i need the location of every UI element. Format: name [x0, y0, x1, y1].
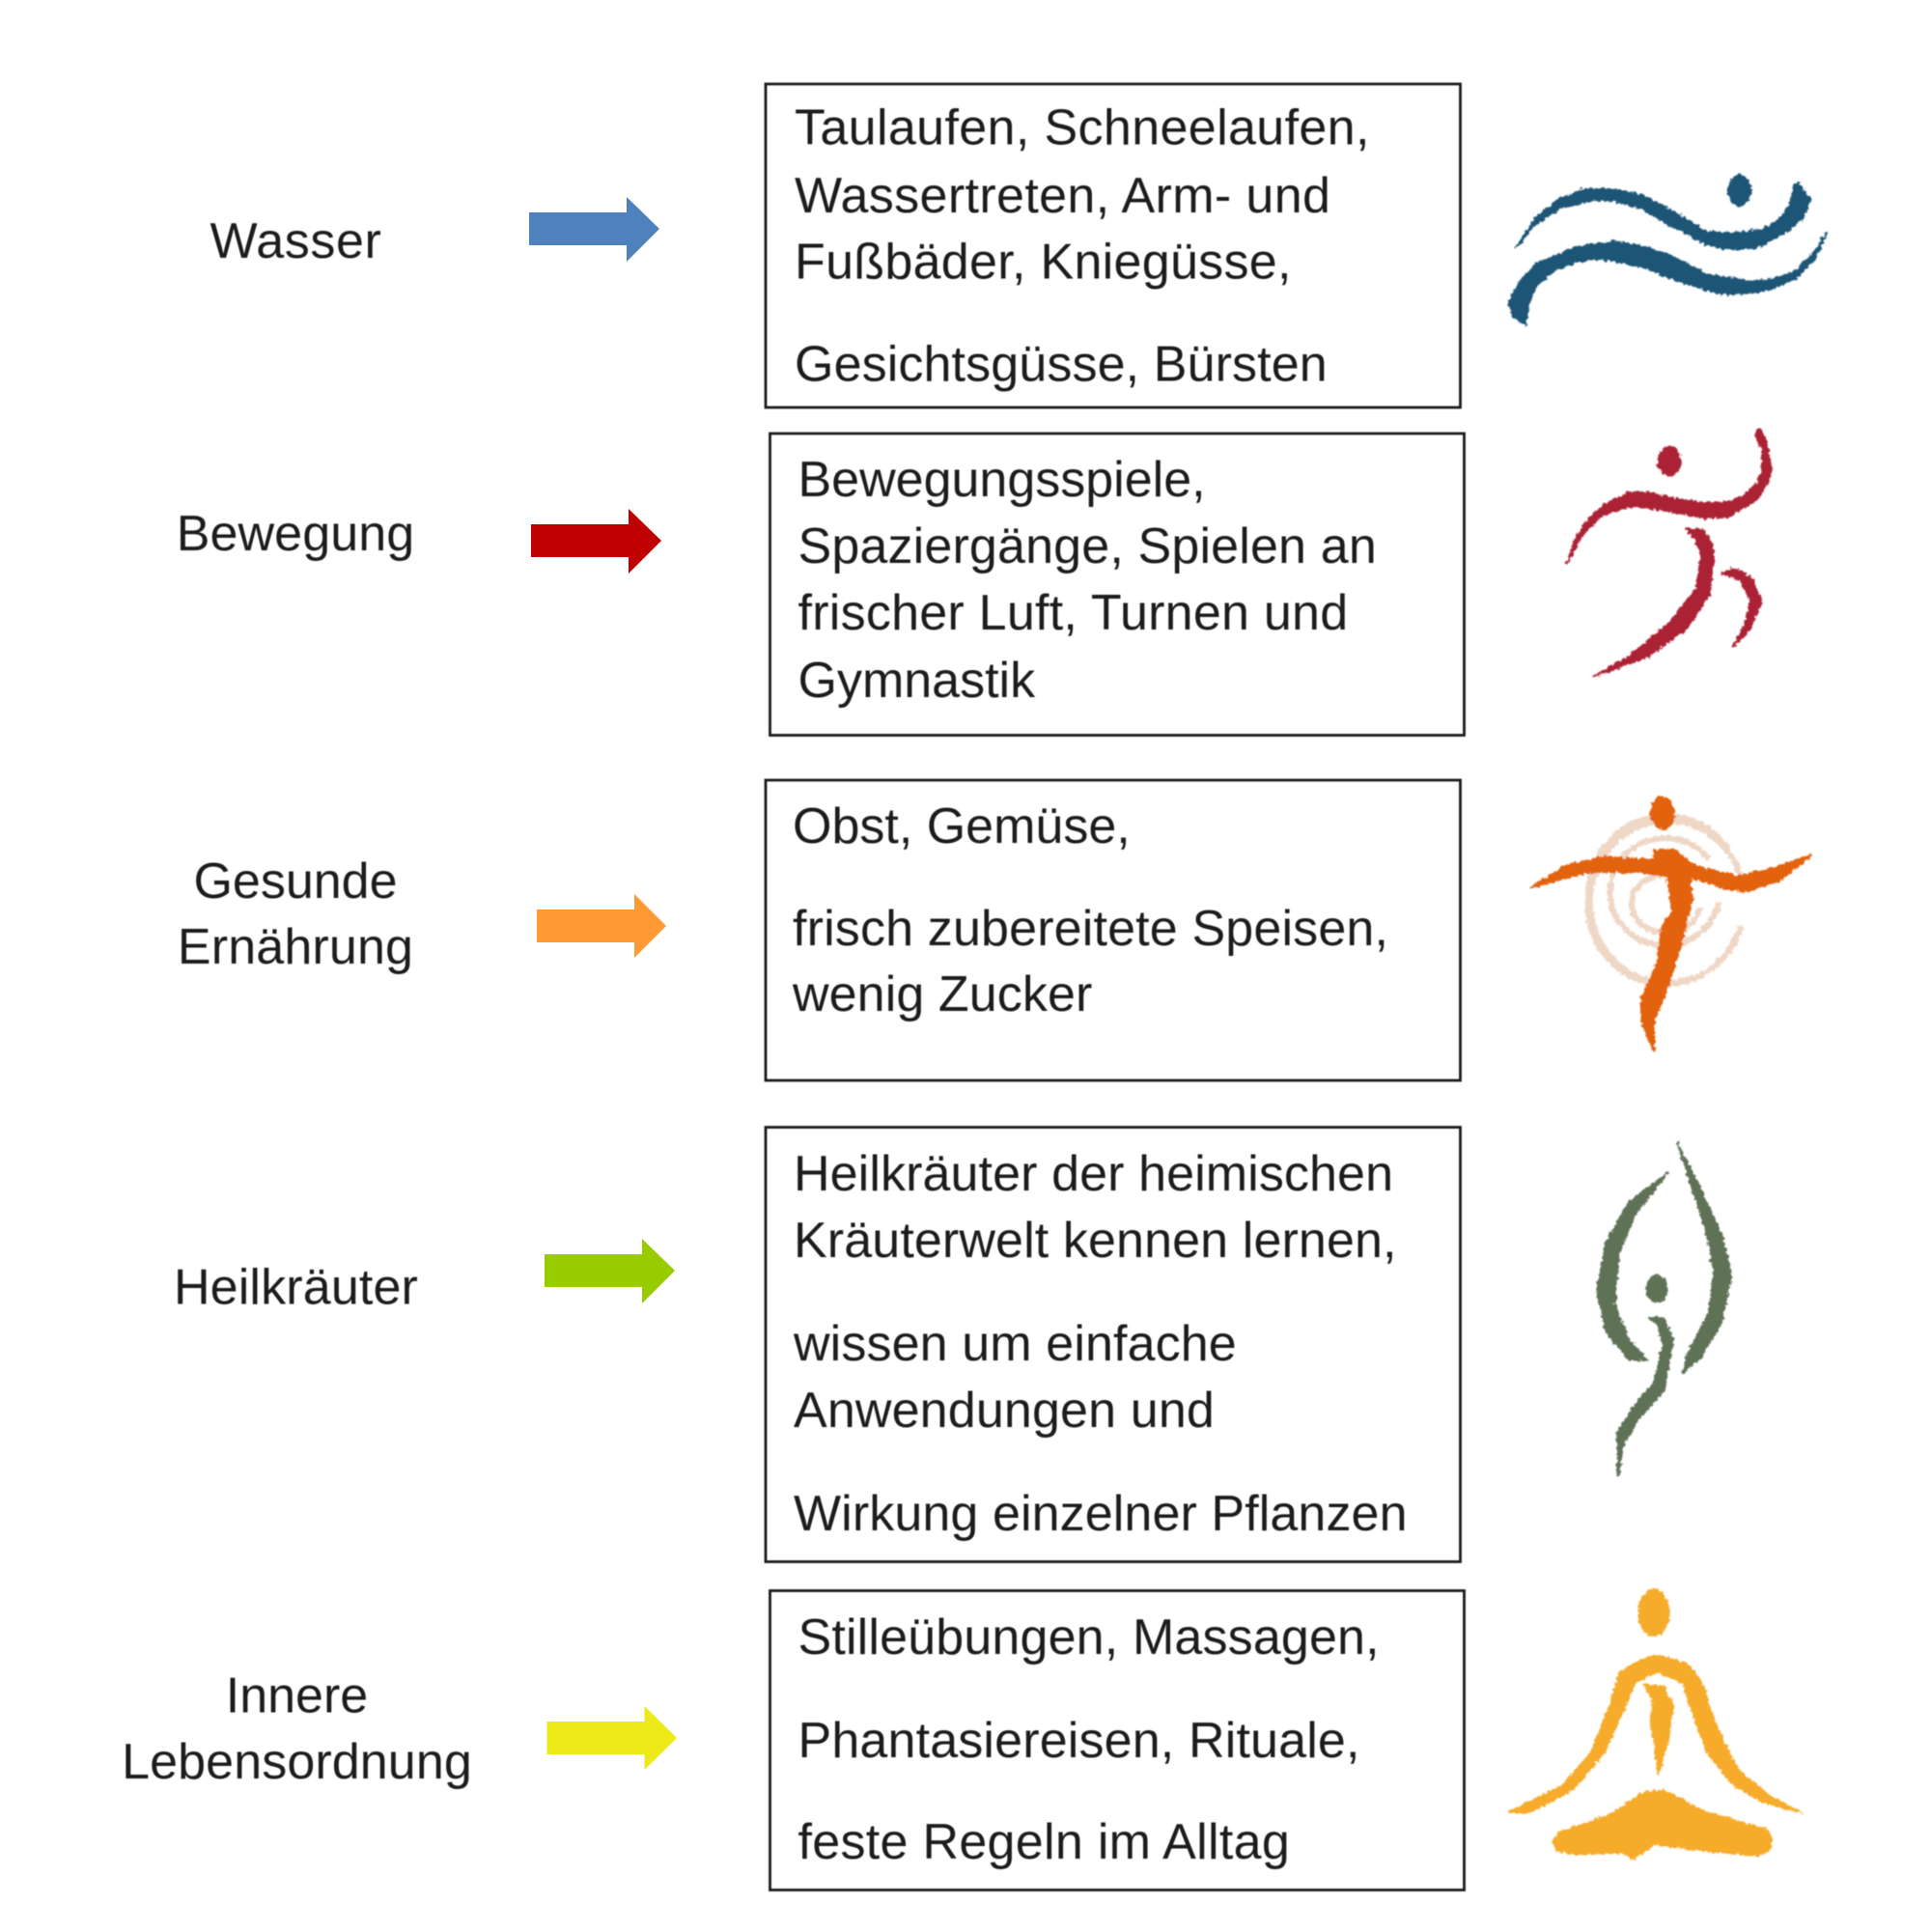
panel: Ernährung text box — [766, 780, 1460, 1080]
arrow: green — [545, 1239, 675, 1303]
panel: Bewegung text box — [770, 434, 1464, 736]
panel: Ernährung text box: frisch zubereitete Speisen, — [793, 901, 1388, 957]
panel: Lebensordnung text box: feste Regeln im Alltag — [798, 1814, 1290, 1870]
icon: leaf figure — [1597, 1142, 1731, 1474]
panel: Bewegung text box: Spaziergänge, Spielen an — [798, 518, 1377, 574]
row label: Gesunde Ernährung: Gesunde — [193, 854, 398, 910]
panel: Heilkräuter text box: Kräuterwelt kennen lernen, — [794, 1213, 1397, 1269]
row label: Gesunde Ernährung: Ernährung — [178, 919, 413, 975]
row label: Innere Lebensordnung: Innere — [226, 1668, 368, 1724]
panel: Wasser text box: Fußbäder, Kniegüsse, — [795, 234, 1292, 290]
row label: Heilkräuter: Heilkräuter — [174, 1259, 418, 1315]
panel: Heilkräuter text box — [766, 1128, 1460, 1562]
row label: Bewegung: Bewegung — [177, 506, 414, 562]
panel: Wasser text box: Gesichtsgüsse, Bürsten — [795, 336, 1328, 392]
arrow: yellow — [546, 1706, 677, 1770]
panel: Wasser text box — [766, 84, 1460, 407]
panel: Heilkräuter text box: Heilkräuter der heimischen — [794, 1146, 1393, 1202]
icon: water waves — [1509, 175, 1827, 325]
panel: Heilkräuter text box: wissen um einfache — [793, 1316, 1237, 1372]
panel: Ernährung text box: wenig Zucker — [792, 966, 1092, 1022]
panel: Wasser text box: Taulaufen, Schneelaufen, — [795, 100, 1370, 156]
row label: Innere Lebensordnung — [122, 1668, 472, 1790]
arrow: red — [531, 509, 661, 574]
row label: Gesunde Ernährung — [178, 854, 413, 975]
panel: Ernährung text box: Obst, Gemüse, — [793, 798, 1131, 854]
panel: Lebensordnung text box: Stilleübungen, Massagen, — [798, 1610, 1380, 1666]
icon: meditating figure — [1509, 1589, 1801, 1860]
arrow: blue — [529, 197, 659, 262]
arrow: orange — [537, 894, 666, 958]
panel: Heilkräuter text box: Anwendungen und — [794, 1383, 1215, 1439]
panel: Bewegung text box: Gymnastik — [798, 653, 1036, 709]
panel: Bewegung text box: Bewegungsspiele, — [798, 452, 1206, 508]
icon: running figure — [1567, 428, 1772, 677]
panel: Bewegung text box: frischer Luft, Turnen und — [798, 585, 1348, 641]
row label: Innere Lebensordnung: Lebensordnung — [122, 1734, 472, 1790]
panel: Lebensordnung text box — [770, 1591, 1464, 1890]
row label: Wasser: Wasser — [210, 213, 381, 269]
panel: Wasser text box: Wassertreten, Arm- und — [795, 168, 1330, 224]
panel: Heilkräuter text box: Wirkung einzelner Pflanzen — [794, 1486, 1408, 1542]
icon: figure with spiral — [1530, 797, 1811, 1051]
panel: Lebensordnung text box: Phantasiereisen, Rituale, — [798, 1713, 1360, 1769]
